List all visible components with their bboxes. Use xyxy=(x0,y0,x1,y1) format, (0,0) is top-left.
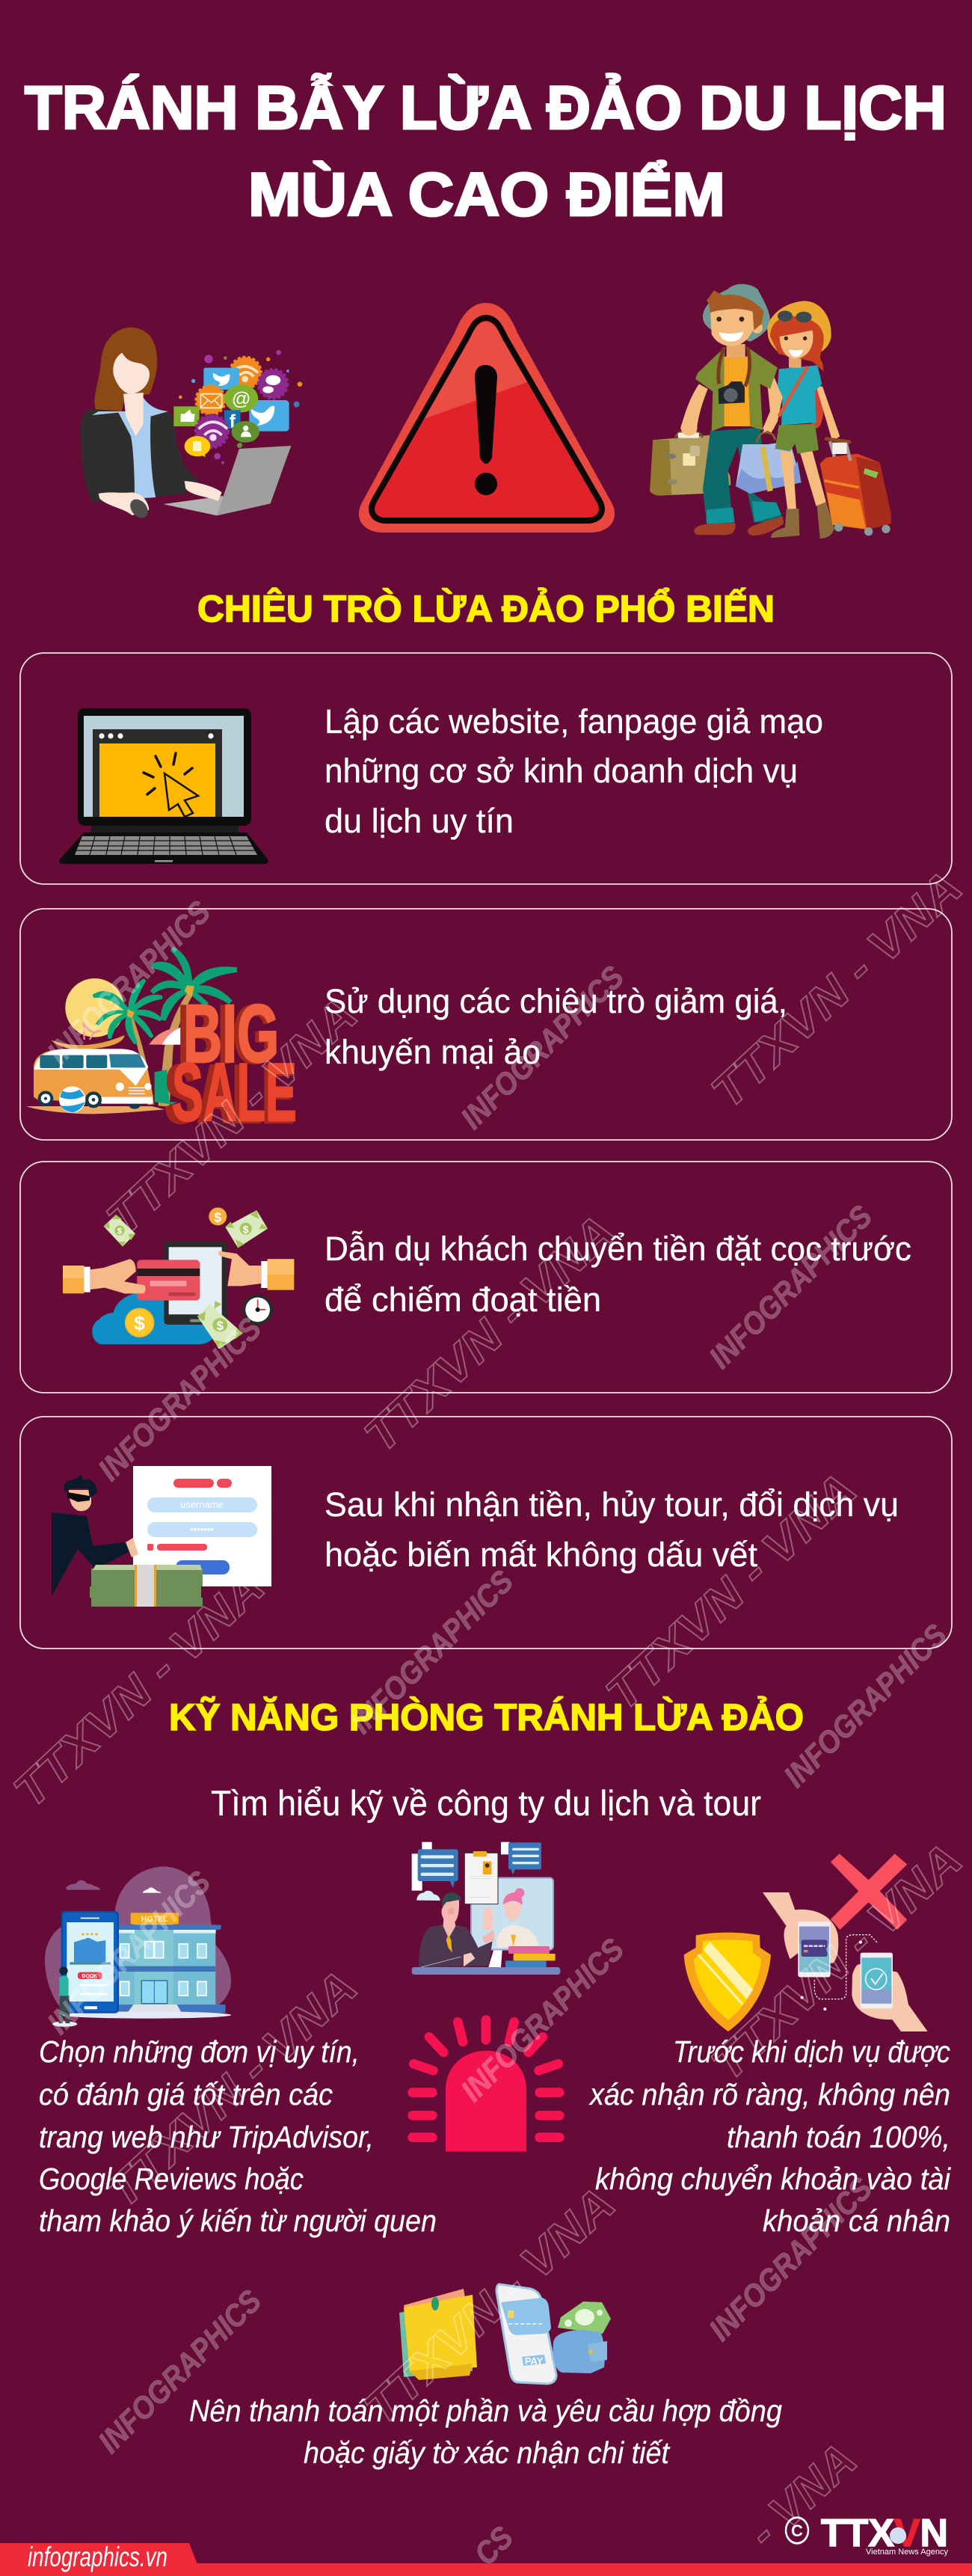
watermarks: INFOGRAPHICS: INFOGRAPHICS xyxy=(777,1617,953,1794)
watermarks: INFOGRAPHICS: INFOGRAPHICS xyxy=(702,2171,879,2347)
text: card 4 xyxy=(324,1485,899,1574)
text: card 1 xyxy=(324,702,823,840)
text: partial payment advice: Nên thanh toán một phần và yêu cầu hợp đồng xyxy=(189,2393,782,2428)
icon: alarm light xyxy=(413,2020,559,2152)
icon: shield and phones with cross xyxy=(684,1853,928,2031)
text: card 1: du lịch uy tín xyxy=(324,802,514,840)
text: do not pay in full: xác nhận rõ ràng, không nên xyxy=(588,2077,950,2112)
text: choose reputable operators: tham khảo ý kiến từ người quen xyxy=(39,2204,437,2238)
watermarks: TTXVN - VNA: TTXVN - VNA xyxy=(701,862,972,1118)
footer bar with site name: infographics.vn xyxy=(28,2542,167,2572)
text: card 1: Lập các website, fanpage giả mạo xyxy=(324,702,823,740)
icon: notes, phone payment and wallet xyxy=(399,2284,611,2384)
watermarks: TTXVN - VNA: TTXVN - VNA xyxy=(4,1561,274,1818)
title: MÙA CAO ĐIỂM xyxy=(248,161,725,229)
icon: hacker with login form and money xyxy=(52,1466,271,1607)
icon: hacker with login form and money: ••••••• xyxy=(190,1524,214,1535)
watermarks: INFOGRAPHICS: INFOGRAPHICS xyxy=(40,1864,217,2040)
icon: card payment hands xyxy=(63,1207,294,1349)
watermarks: INFOGRAPHICS: INFOGRAPHICS xyxy=(91,1310,268,1487)
heading: common scam tricks: CHIÊU TRÒ LỪA ĐẢO PHỔ BIẾN xyxy=(197,587,775,630)
icon: card payment hands: $ xyxy=(117,1227,123,1236)
icon: tourist couple with luggage xyxy=(650,284,891,539)
text: card 2: Sử dụng các chiêu trò giảm giá, xyxy=(324,982,787,1020)
icon: card payment hands: $ xyxy=(217,1319,224,1333)
text: choose reputable operators: Google Reviews hoặc xyxy=(39,2162,304,2196)
text: card 3: Dẫn dụ khách chuyển tiền đặt cọc trước xyxy=(324,1230,911,1268)
icon: laptop with cursor xyxy=(59,708,268,864)
watermarks: INFOGRAPHICS: INFOGRAPHICS xyxy=(454,959,630,1135)
watermarks: TTXVN - VNA: TTXVN - VNA xyxy=(96,989,367,1245)
icon: card payment hands: $ xyxy=(243,1223,249,1235)
icon: hacker with login form and money: username xyxy=(180,1499,224,1510)
text: do not pay in full: khoản cá nhân xyxy=(763,2204,950,2238)
watermarks: INFOGRAPHICS xyxy=(40,894,953,2572)
panel: deposit scam xyxy=(20,1162,952,1393)
text: choose reputable operators xyxy=(39,2034,437,2238)
text: card 2: khuyến mại ảo xyxy=(324,1033,541,1071)
watermarks: INFOGRAPHICS: INFOGRAPHICS xyxy=(454,1931,630,2108)
text: card 3 xyxy=(324,1230,911,1319)
icon: big sale beach van: BIG xyxy=(177,989,276,1081)
text: card 4: hoặc biến mất không dấu vết xyxy=(324,1536,757,1574)
watermarks: INFOGRAPHICS: INFOGRAPHICS xyxy=(91,2283,268,2459)
icon: big sale beach van xyxy=(26,948,297,1141)
text: card 1: những cơ sở kinh doanh dịch vụ xyxy=(324,752,798,790)
text: card 4: Sau khi nhận tiền, hủy tour, đổi dịch vụ xyxy=(324,1485,899,1524)
watermarks: TTXVN - VNA: TTXVN - VNA xyxy=(96,1961,367,2218)
watermarks: TTXVN - VNA: TTXVN - VNA xyxy=(354,2178,625,2435)
icon: big sale beach van: SALE xyxy=(172,1046,297,1138)
icon: hotel and booking phone: HOTEL xyxy=(141,1915,168,1924)
text: choose reputable operators: Chọn những đơn vị uy tín, xyxy=(39,2034,360,2069)
icon: card payment hands: $ xyxy=(134,1312,145,1334)
icon: notes, phone payment and wallet: PAY xyxy=(525,2355,544,2367)
title xyxy=(25,74,947,229)
watermarks: INFOGRAPHICS: INFOGRAPHICS xyxy=(40,894,217,1070)
text: do not pay in full xyxy=(588,2034,952,2238)
logo: TTXVN copyright: Vietnam News Agency xyxy=(866,2548,948,2557)
subheading: Tìm hiểu kỹ về công ty du lịch và tour xyxy=(211,1783,761,1823)
watermarks: INFOGRAPHICS: CS xyxy=(467,2519,520,2572)
icon: interview and video call xyxy=(412,1842,560,1975)
watermarks: INFOGRAPHICS: INFOGRAPHICS xyxy=(343,1563,520,1740)
watermarks: TTXVN - VNA: TTXVN - VNA xyxy=(354,1206,625,1462)
icon: big sale beach van: SALE xyxy=(164,1049,294,1141)
icon: woman at laptop with social media icons: f xyxy=(230,411,236,432)
text: card 3: để chiếm đoạt tiền xyxy=(324,1281,601,1319)
icon: big sale beach van: BIG xyxy=(183,987,279,1079)
footer bar with site name xyxy=(0,2542,972,2576)
logo: TTXVN copyright: C xyxy=(791,2521,803,2540)
icon: hotel and booking phone: BOOK xyxy=(82,1974,97,1979)
watermarks: TTXVN - VNA xyxy=(4,862,972,2558)
watermarks: TTXVN - VNA: - VNA xyxy=(738,2434,867,2558)
icon: card payment hands: $ xyxy=(214,1209,221,1224)
panel: disappearing scammers xyxy=(20,1417,952,1649)
watermarks: TTXVN - VNA: TTXVN - VNA xyxy=(701,1834,972,2091)
text: choose reputable operators: có đánh giá tốt trên các xyxy=(39,2077,333,2112)
text: choose reputable operators: trang web như TripAdvisor, xyxy=(39,2120,374,2154)
text: do not pay in full: thanh toán 100%, xyxy=(727,2120,950,2154)
icon: woman at laptop with social media icons: @ xyxy=(232,389,251,410)
logo: TTXVN copyright: TTXVN xyxy=(821,2512,948,2555)
text: partial payment advice xyxy=(189,2393,782,2470)
heading: prevention skills: KỸ NĂNG PHÒNG TRÁNH LỪA ĐẢO xyxy=(169,1696,804,1738)
icon: woman at laptop with social media icons xyxy=(81,328,302,521)
panel: fake websites xyxy=(20,653,952,884)
text: partial payment advice: hoặc giấy tờ xác nhận chi tiết xyxy=(304,2435,670,2470)
watermarks: INFOGRAPHICS: INFOGRAPHICS xyxy=(702,1198,879,1375)
panel: fake discounts xyxy=(20,909,952,1141)
title: TRÁNH BẪY LỪA ĐẢO DU LỊCH xyxy=(25,74,947,142)
text: do not pay in full: không chuyển khoản vào tài xyxy=(595,2162,952,2196)
watermarks: TTXVN - VNA: TTXVN - VNA xyxy=(596,1464,867,1720)
icon: hotel and booking phone xyxy=(45,1866,231,2027)
icon: hotel and booking phone: ★★★★ xyxy=(81,1932,99,1937)
icon: warning triangle xyxy=(359,303,615,533)
text: card 2 xyxy=(324,982,787,1071)
